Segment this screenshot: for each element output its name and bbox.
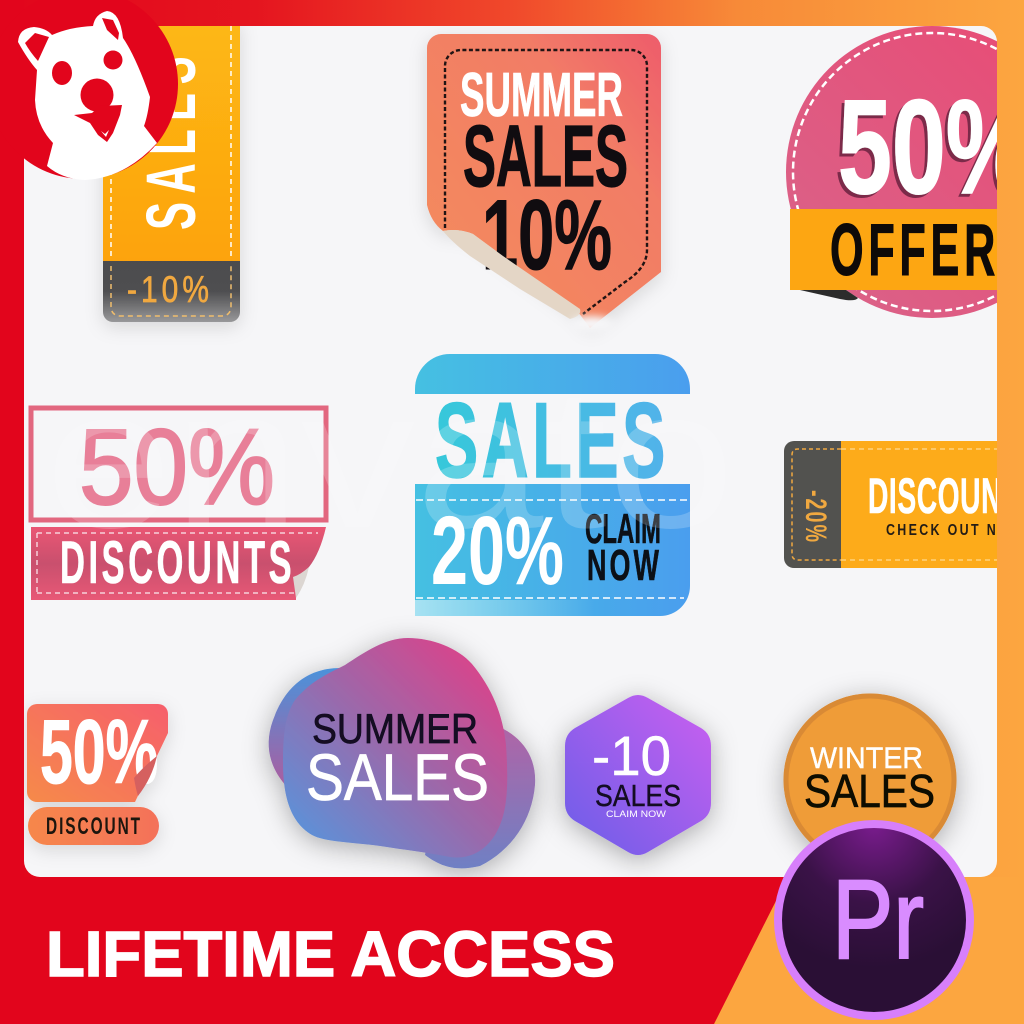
- badge: summer sales blob: SUMMER: [312, 705, 478, 752]
- badge: summer sales blob: SALES: [306, 740, 489, 814]
- badge: blue sales 20% claim now: CLAIM: [585, 505, 661, 552]
- badge: -10 sales hexagon: SALES: [595, 778, 681, 813]
- badge: summer sales 10% peeled tag: [427, 34, 661, 332]
- badge: 50% discounts pink: DISCOUNTS: [60, 529, 295, 596]
- banner: orange corner: [714, 877, 1024, 1024]
- badge: summer sales blob: [269, 638, 535, 868]
- badge: vertical orange sales tag: [103, 20, 240, 322]
- badge: blue sales 20% claim now: NOW: [587, 541, 662, 590]
- badge: 50% offer circle: [786, 26, 997, 318]
- badge: summer sales 10% peeled tag: SALES: [463, 108, 628, 205]
- badge: discount -20% orange tag: -20%: [799, 490, 832, 544]
- badge: 50% discounts pink: 50%: [79, 406, 275, 527]
- badge: -10 sales hexagon: CLAIM NOW: [606, 809, 667, 819]
- badge: summer sales 10% peeled tag: 10%: [482, 179, 612, 290]
- badge: winter sales circle: SALES: [804, 765, 935, 817]
- icon: premiere pro: Pr: [832, 857, 924, 982]
- icon: premiere pro: [778, 824, 970, 1016]
- heading: lifetime access: LIFETIME ACCESS: [46, 918, 615, 990]
- icon: white bear head: [18, 11, 157, 180]
- badge: summer sales 10% peeled tag: SUMMER: [460, 61, 623, 130]
- logo: red bear badge: [0, 0, 178, 180]
- badge: blue sales 20% claim now: SALES: [435, 380, 669, 500]
- badge: -10 sales hexagon: [565, 695, 711, 855]
- badge: small 50% discount: 50%: [40, 702, 158, 803]
- badge: winter sales circle: WINTER: [810, 742, 923, 775]
- badge: vertical orange sales tag: -10%: [127, 269, 213, 310]
- badge: 50% discounts pink: [31, 406, 326, 600]
- badge: discount -20% orange tag: [784, 441, 1002, 568]
- banner: red ribbon: [0, 877, 788, 1024]
- left red edge: [0, 0, 24, 1024]
- badge: small 50% discount: [27, 702, 168, 845]
- badge: blue sales 20% claim now: 20%: [431, 496, 564, 605]
- badge: winter sales circle: [784, 694, 956, 866]
- badge: -10 sales hexagon: -10: [592, 724, 671, 787]
- watermark: envato: envato: [45, 347, 735, 570]
- badge: blue sales 20% claim now: [415, 354, 690, 616]
- badge: small 50% discount: DISCOUNT: [46, 813, 142, 840]
